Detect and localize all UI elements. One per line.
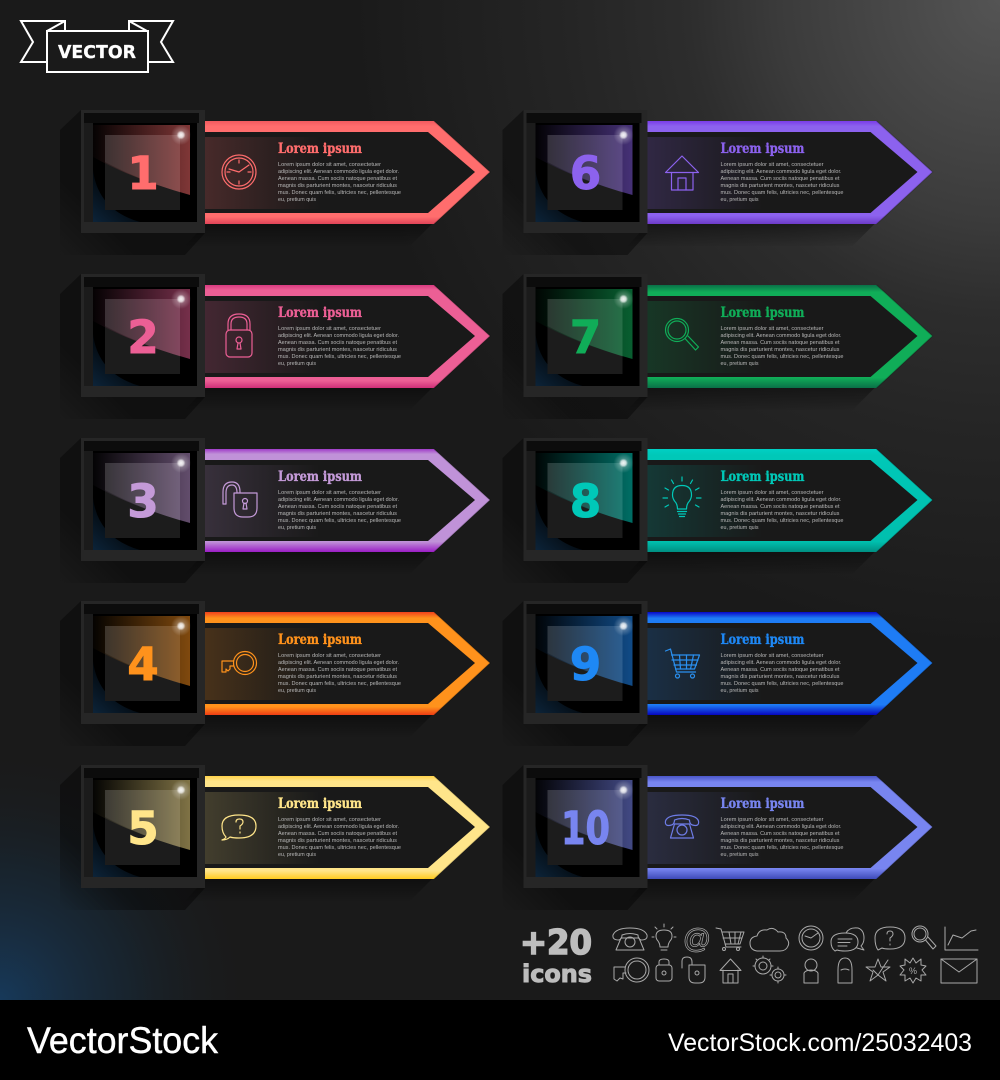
icon set: @ [683, 923, 711, 954]
item 6: adipiscing elit. Aenean commodo ligula eget dolor. [720, 169, 842, 175]
item 10: Lorem ipsum dolor sit amet, consectetuer [720, 817, 824, 823]
+20 icons label [520, 923, 592, 988]
item 2: 2 [127, 311, 159, 364]
item 5: Aenean massa. Cum sociis natoque penatibus et [278, 831, 397, 837]
item 7: magnis dis parturient montes, nascetur ridiculus [720, 347, 840, 353]
item 3: adipiscing elit. Aenean commodo ligula eget dolor. [278, 497, 399, 503]
item 3: Lorem ipsum dolor sit amet, consectetuer [278, 490, 381, 496]
item 5: magnis dis parturient montes, nascetur ridiculus [278, 838, 397, 844]
item 10: magnis dis parturient montes, nascetur ridiculus [720, 838, 840, 844]
icon set [613, 923, 978, 983]
item 9 [502, 601, 932, 746]
item 9: mus. Donec quam felis, ultricies nec, pellentesque [720, 681, 844, 687]
item 6: Aenean massa. Cum sociis natoque penatibus et [720, 176, 840, 182]
item 9: Aenean massa. Cum sociis natoque penatibus et [720, 667, 840, 673]
item 4: Aenean massa. Cum sociis natoque penatibus et [278, 667, 397, 673]
item 3 [60, 438, 490, 583]
item 6: Lorem ipsum [720, 141, 804, 157]
item 3: magnis dis parturient montes, nascetur ridiculus [278, 511, 397, 517]
item 1: Aenean massa. Cum sociis natoque penatibus et [278, 176, 397, 182]
vector ribbon badge: VECTOR [58, 42, 136, 63]
footer bar: VectorStock.com/25032403 [668, 1029, 972, 1057]
item 10: 10 [561, 802, 610, 855]
item 7: Aenean massa. Cum sociis natoque penatibus et [720, 340, 840, 346]
item 2: magnis dis parturient montes, nascetur ridiculus [278, 347, 397, 353]
item 10: adipiscing elit. Aenean commodo ligula eget dolor. [720, 824, 842, 830]
item 10: eu, pretium quis [720, 852, 759, 858]
item 8: magnis dis parturient montes, nascetur ridiculus [720, 511, 840, 517]
item 5: Lorem ipsum dolor sit amet, consectetuer [278, 817, 381, 823]
item 9: Lorem ipsum [720, 632, 804, 648]
item 10: Aenean massa. Cum sociis natoque penatibus et [720, 831, 840, 837]
footer bar: VectorStock [27, 1020, 218, 1061]
item 1: mus. Donec quam felis, ultricies nec, pellentesque [278, 190, 401, 196]
item 1: adipiscing elit. Aenean commodo ligula eget dolor. [278, 169, 399, 175]
item 8: adipiscing elit. Aenean commodo ligula eget dolor. [720, 497, 842, 503]
item 9: adipiscing elit. Aenean commodo ligula eget dolor. [720, 660, 842, 666]
item 6: 6 [570, 147, 601, 200]
item 7 [502, 274, 932, 419]
item 3: Aenean massa. Cum sociis natoque penatibus et [278, 504, 397, 510]
item 5: 5 [127, 802, 159, 855]
item 4: magnis dis parturient montes, nascetur ridiculus [278, 674, 397, 680]
item 3: eu, pretium quis [278, 525, 316, 531]
item 9: eu, pretium quis [720, 688, 759, 694]
item 7: eu, pretium quis [720, 361, 759, 367]
item 8: Aenean massa. Cum sociis natoque penatibus et [720, 504, 840, 510]
item 6: Lorem ipsum dolor sit amet, consectetuer [720, 162, 824, 168]
item 9: magnis dis parturient montes, nascetur ridiculus [720, 674, 840, 680]
+20 icons label: icons [522, 960, 592, 988]
item 4: mus. Donec quam felis, ultricies nec, pellentesque [278, 681, 401, 687]
item 8: Lorem ipsum [720, 469, 804, 485]
item 7: Lorem ipsum [720, 305, 804, 321]
item 5 [60, 765, 490, 910]
item 6 [502, 110, 932, 255]
item 9: Lorem ipsum dolor sit amet, consectetuer [720, 653, 824, 659]
item 1 [60, 110, 490, 255]
item 3: mus. Donec quam felis, ultricies nec, pellentesque [278, 518, 401, 524]
item 7: Lorem ipsum dolor sit amet, consectetuer [720, 326, 824, 332]
item 7: 7 [570, 311, 601, 364]
item 7: mus. Donec quam felis, ultricies nec, pellentesque [720, 354, 844, 360]
item 4: 4 [127, 638, 159, 691]
item 2: Aenean massa. Cum sociis natoque penatibus et [278, 340, 397, 346]
item 8: 8 [570, 475, 601, 528]
item 10: Lorem ipsum [720, 796, 804, 812]
item 2: mus. Donec quam felis, ultricies nec, pellentesque [278, 354, 401, 360]
item 6: mus. Donec quam felis, ultricies nec, pellentesque [720, 190, 844, 196]
item 2: Lorem ipsum dolor sit amet, consectetuer [278, 326, 381, 332]
item 2 [60, 274, 490, 419]
item 1: 1 [127, 147, 159, 200]
+20 icons label: +20 [520, 923, 592, 963]
item 1: Lorem ipsum [278, 141, 362, 157]
item 6: eu, pretium quis [720, 197, 759, 203]
item 8: Lorem ipsum dolor sit amet, consectetuer [720, 490, 824, 496]
item 2: adipiscing elit. Aenean commodo ligula eget dolor. [278, 333, 399, 339]
item 10: mus. Donec quam felis, ultricies nec, pellentesque [720, 845, 844, 851]
item 4 [60, 601, 490, 746]
item 8 [502, 438, 932, 583]
item 8: mus. Donec quam felis, ultricies nec, pellentesque [720, 518, 844, 524]
item 5: eu, pretium quis [278, 852, 316, 858]
item 5: Lorem ipsum [278, 796, 362, 812]
item 4: Lorem ipsum dolor sit amet, consectetuer [278, 653, 381, 659]
item 7: adipiscing elit. Aenean commodo ligula eget dolor. [720, 333, 842, 339]
item 1: eu, pretium quis [278, 197, 316, 203]
item 6: magnis dis parturient montes, nascetur ridiculus [720, 183, 840, 189]
item 3: Lorem ipsum [278, 469, 362, 485]
item 4: Lorem ipsum [278, 632, 362, 648]
item 2: eu, pretium quis [278, 361, 316, 367]
item 4: adipiscing elit. Aenean commodo ligula eget dolor. [278, 660, 399, 666]
item 4: eu, pretium quis [278, 688, 316, 694]
item 5: adipiscing elit. Aenean commodo ligula eget dolor. [278, 824, 399, 830]
footer bar [0, 1000, 1000, 1080]
item 3: 3 [127, 475, 159, 528]
item 5: mus. Donec quam felis, ultricies nec, pellentesque [278, 845, 401, 851]
item 8: eu, pretium quis [720, 525, 759, 531]
item 10 [502, 765, 932, 910]
item 1: magnis dis parturient montes, nascetur ridiculus [278, 183, 397, 189]
item 9: 9 [570, 638, 601, 691]
vector ribbon badge [21, 21, 173, 72]
item 1: Lorem ipsum dolor sit amet, consectetuer [278, 162, 381, 168]
icon set: % [909, 966, 917, 976]
item 2: Lorem ipsum [278, 305, 362, 321]
